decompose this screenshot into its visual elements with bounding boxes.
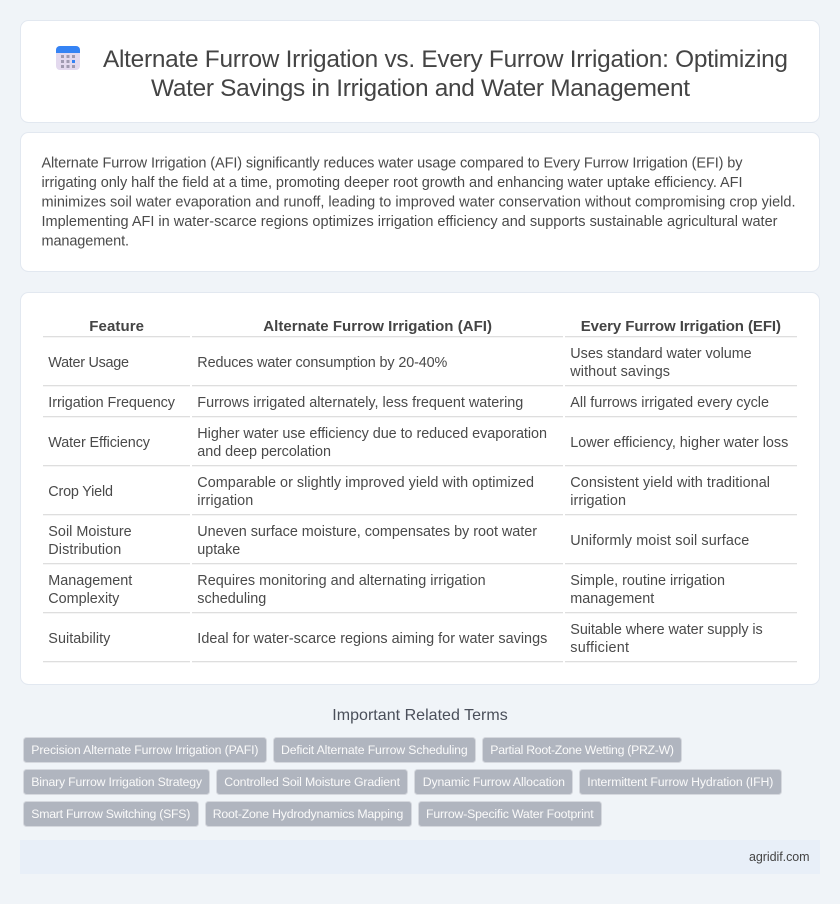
chip: binary strategy: Binary Furrow Irrigation Strategy [31,775,203,789]
chip: dynamic allocation [414,770,572,794]
table row: management complexity [48,573,725,607]
chip: PRZ-W: Partial Root-Zone Wetting (PRZ-W) [490,743,674,757]
table row: irrigation frequency: All furrows irrigated every cycle [570,395,769,411]
text block: introduction: Alternate Furrow Irrigation (AFI) significantly reduces water usage compared to Every Furrow Irrigation (EFI) by [42,156,743,172]
table header row: Every Furrow Irrigation (EFI) [581,318,781,335]
chip: hydrodynamics mapping [206,802,412,826]
table row: crop yield: Consistent yield with traditional [570,475,770,491]
table row: water efficiency: Water Efficiency [48,435,151,451]
chip: IFH [580,770,782,794]
panel: introduction paragraph [20,132,820,272]
text block: introduction [42,156,796,250]
table row: irrigation frequency: Irrigation Frequency [48,395,176,411]
table row: water usage: Water Usage [48,355,129,371]
chip: soil moisture gradient: Controlled Soil Moisture Gradient [224,775,401,789]
table row: suitability: sufficient [570,640,629,656]
chip: SFS [24,802,198,826]
table row: soil moisture distribution: Distribution [48,542,121,558]
table row: soil moisture distribution: uptake [197,542,240,558]
text block: introduction: Implementing AFI in water-scarce regions optimizes irrigation efficiency and supports sustainable agricultural water [42,214,778,230]
table row: crop yield: irrigation [197,493,253,509]
panel: title header [20,20,820,122]
table row: crop yield [48,475,770,509]
icon: calendar [56,46,80,70]
table row: soil moisture distribution: Uniformly moist soil surface [570,533,749,549]
chip: binary strategy [24,770,210,794]
table row: soil moisture distribution: Soil Moisture [48,524,132,540]
text block: introduction: minimizes soil water evaporation and runoff, leading to improved water conservation without compromising crop yield. [42,194,796,210]
table row: water efficiency: Higher water use efficiency due to reduced evaporation [197,426,547,442]
table header row: Feature [89,318,144,335]
chip: dynamic allocation: Dynamic Furrow Allocation [423,775,565,789]
table row: management complexity: scheduling [197,591,266,607]
table row: management complexity: Simple, routine irrigation [570,573,725,589]
table row: water usage: Reduces water consumption by 20-40% [197,355,448,371]
chip: PRZ-W [482,738,682,762]
table row: water usage: Uses standard water volume [570,346,752,362]
table row: water efficiency: Lower efficiency, higher water loss [570,435,788,451]
chip: water footprint: Furrow-Specific Water Footprint [426,807,594,821]
table row: water usage [48,346,752,380]
panel: related term chips [24,738,782,826]
table row: water usage: without savings [569,364,670,380]
chip: PAFI [24,738,266,762]
chip: PAFI: Precision Alternate Furrow Irrigation (PAFI) [31,743,258,757]
chip: deficit scheduling: Deficit Alternate Furrow Scheduling [281,743,468,757]
footer [20,840,820,874]
title [103,46,788,102]
table row: suitability: Ideal for water-scarce regions aiming for water savings [197,631,547,647]
table row: water efficiency: and deep percolation [197,444,331,460]
table row: management complexity: management [570,591,654,607]
text block: introduction: irrigating only half the field at a time, promoting deeper root growth and enhancing water uptake efficiency. AFI [42,175,742,191]
table header row [89,318,781,335]
title: Water Savings in Irrigation and Water Management [151,75,690,102]
chip: IFH: Intermittent Furrow Hydration (IFH) [587,775,773,789]
chip: SFS: Smart Furrow Switching (SFS) [31,807,190,821]
table row: irrigation frequency [48,395,769,411]
panel: comparison table [20,292,820,684]
table row: suitability [48,622,763,656]
table row: crop yield: Comparable or slightly improved yield with optimized [197,475,534,491]
table row: water efficiency [48,426,788,460]
table row: suitability: Suitability [48,631,111,647]
title: Alternate Furrow Irrigation vs. Every Furrow Irrigation: Optimizing [103,46,788,73]
chip: soil moisture gradient [216,770,408,794]
table row: management complexity: Complexity [48,591,120,607]
table row: management complexity: Requires monitoring and alternating irrigation [197,573,486,589]
table row: soil moisture distribution [48,524,749,558]
chip: hydrodynamics mapping: Root-Zone Hydrodynamics Mapping [213,807,403,821]
chip: deficit scheduling [274,738,476,762]
table row: crop yield: Crop Yield [48,484,113,500]
chip: water footprint [418,802,602,826]
table row: soil moisture distribution: Uneven surface moisture, compensates by root water [197,524,537,540]
text block: introduction: management. [42,234,129,250]
footer: agridif.com [749,850,810,864]
table row: crop yield: irrigation [570,493,626,509]
table row: suitability: Suitable where water supply is [570,622,763,638]
table row: management complexity: Management [48,573,132,589]
table header row: Alternate Furrow Irrigation (AFI) [263,318,492,335]
heading: important related terms: Important Related Terms [332,707,508,724]
table row: irrigation frequency: Furrows irrigated alternately, less frequent watering [197,395,523,411]
